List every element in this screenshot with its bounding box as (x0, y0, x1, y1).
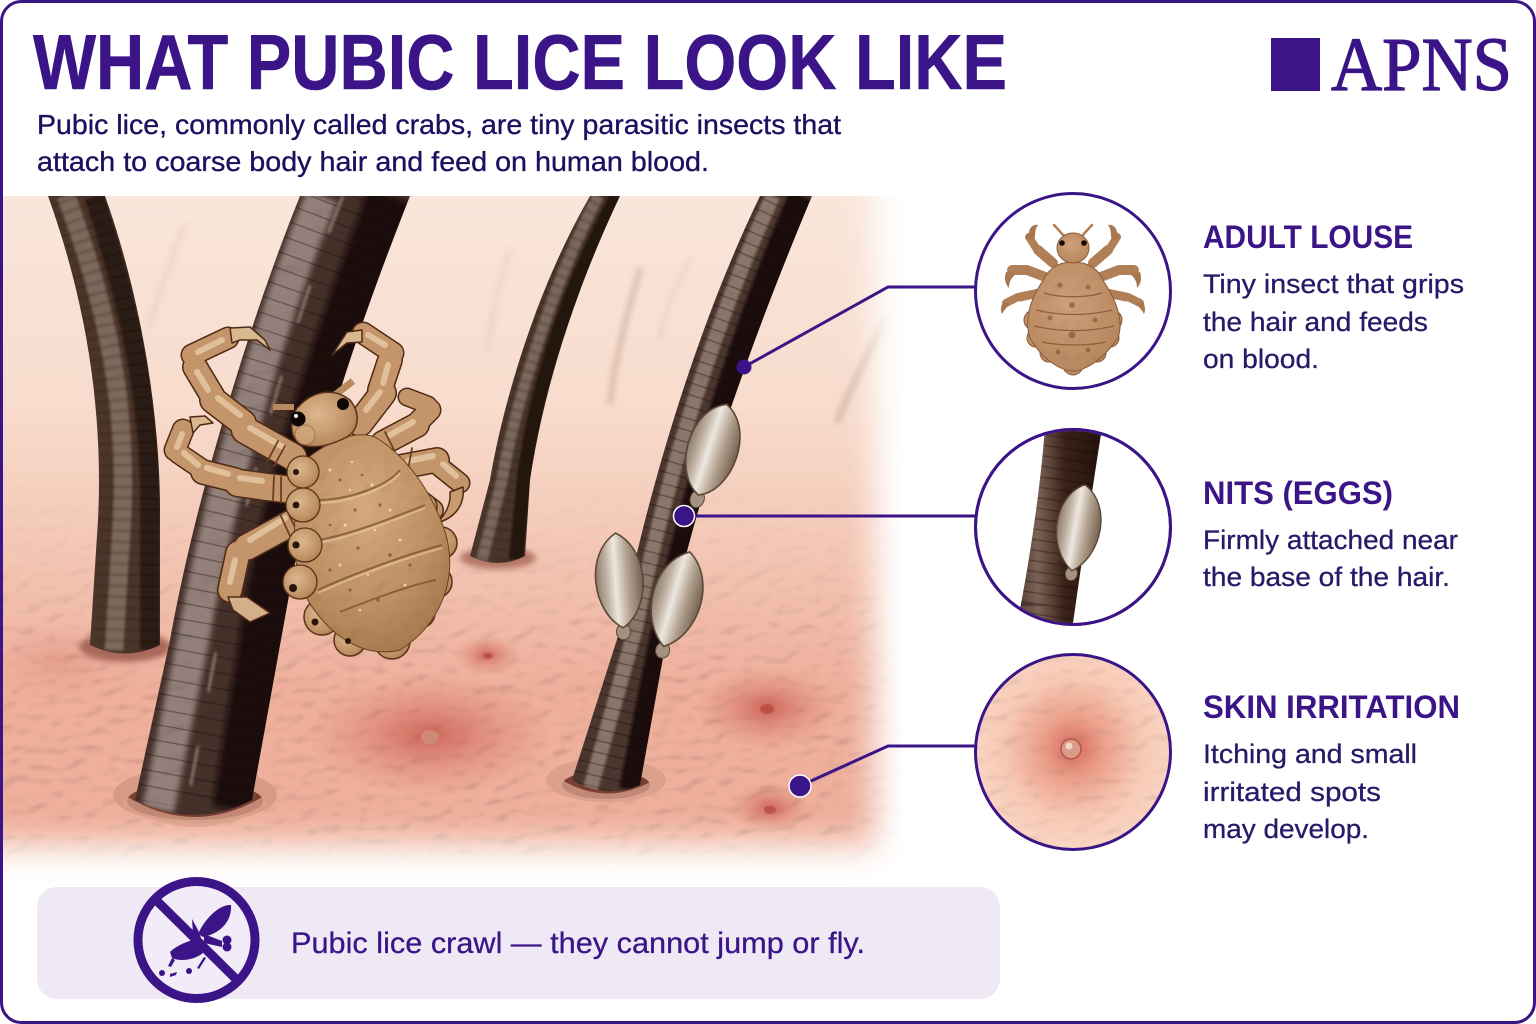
text block: adult louse: the hair and feeds (1203, 307, 1428, 337)
intro text: attach to coarse body hair and feed on human blood. (37, 146, 709, 177)
text block: adult louse: ADULT LOUSE (1203, 219, 1413, 255)
text block: adult louse: Tiny insect that grips (1203, 269, 1464, 299)
nit: upper (685, 404, 741, 508)
hair: far left (40, 190, 171, 670)
faint background hairs (150, 225, 885, 420)
connector: nits (674, 506, 976, 526)
panel: skin irritation circle (975, 654, 1171, 850)
text block: skin irritation (1203, 689, 1460, 844)
connector: adult louse (736, 287, 976, 374)
icon: no jumping or flying (138, 882, 255, 998)
text block: nits (1203, 475, 1458, 592)
louse rear lobes (304, 493, 457, 659)
panel: adult louse circle (976, 194, 1170, 388)
nit: lower left (594, 532, 644, 640)
illustration: magnified hairs on skin (0, 190, 920, 886)
louse head (273, 404, 294, 410)
hair: right shaft (546, 190, 820, 803)
hair close-up (1020, 431, 1101, 623)
louse left lobes (283, 456, 322, 599)
intro text (37, 109, 841, 177)
hair: main thick shaft (113, 190, 420, 840)
panel: nits circle (976, 425, 1170, 635)
nit: lower right (650, 551, 704, 659)
louse segment ridges (318, 470, 442, 612)
callout text: Pubic lice crawl — they cannot jump or fly. (291, 927, 865, 960)
large crab louse on hair (175, 327, 463, 660)
intro text: Pubic lice, commonly called crabs, are tiny parasitic insects that (37, 109, 841, 140)
hair: back centre (460, 190, 630, 575)
text block: skin irritation: Itching and small (1203, 739, 1417, 769)
text block: skin irritation: irritated spots (1203, 777, 1381, 807)
louse lobe spots (289, 469, 351, 644)
louse legs (175, 333, 460, 590)
title: WHAT PUBIC LICE LOOK LIKE (33, 18, 1007, 106)
louse claws (230, 327, 270, 350)
nit close-up (1056, 484, 1102, 582)
text block: nits: the base of the hair. (1203, 562, 1450, 592)
louse body speckles (328, 461, 406, 611)
icon: small adult louse (1001, 225, 1145, 375)
logo: APNS (1331, 23, 1512, 107)
text block: adult louse (1203, 219, 1464, 374)
text block: nits: NITS (EGGS) (1203, 475, 1393, 511)
text block: adult louse: on blood. (1203, 344, 1319, 374)
skin (0, 196, 920, 886)
text block: skin irritation: SKIN IRRITATION (1203, 689, 1460, 725)
text block: nits: Firmly attached near (1203, 525, 1458, 555)
text block: skin irritation: may develop. (1203, 814, 1369, 844)
connector: skin irritation (789, 746, 976, 797)
callout bar (37, 882, 1000, 999)
louse body (295, 435, 450, 652)
